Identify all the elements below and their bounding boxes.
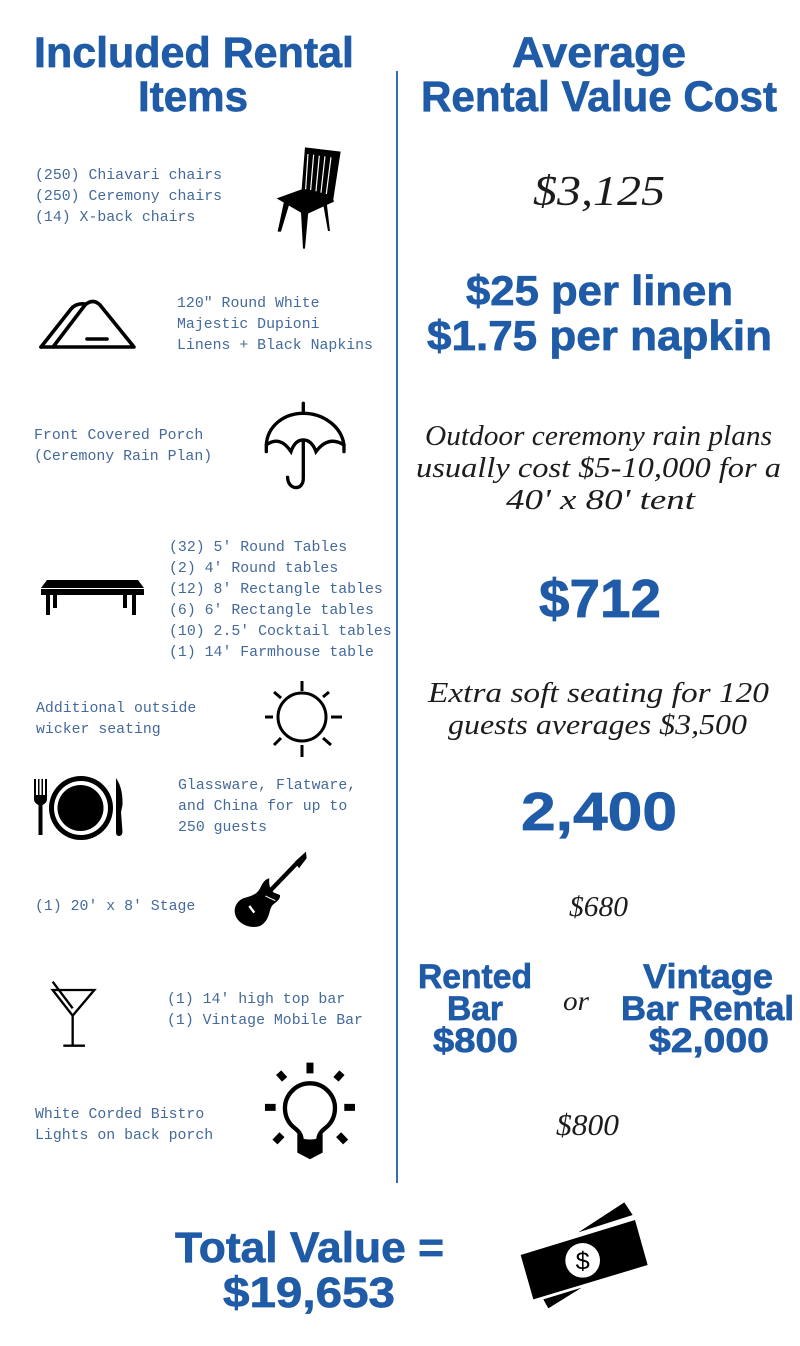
cost: rented bar <box>418 958 532 1060</box>
text: linens: Majestic Dupioni <box>177 317 320 333</box>
text: chairs: (250) Ceremony chairs <box>35 189 222 205</box>
cost: glassware: 2,400 <box>521 782 677 842</box>
heading: average rental value cost: Average <box>512 29 686 77</box>
cost: tables: $712 <box>539 569 661 629</box>
text: porch: (Ceremony Rain Plan) <box>34 449 212 465</box>
cost: soft seating <box>427 677 770 741</box>
cost: stage: $680 <box>569 891 629 923</box>
text: bars: (1) 14' high top bar <box>167 992 345 1008</box>
text: chairs: (250) Chiavari chairs <box>35 168 222 184</box>
cost: linens: $25 per linen <box>466 267 733 314</box>
cost: soft seating: guests averages $3,500 <box>448 709 748 741</box>
cost: vintage bar <box>621 958 794 1060</box>
text: tables: (12) 8' Rectangle tables <box>169 582 383 598</box>
text: stage: (1) 20' x 8' Stage <box>35 899 195 915</box>
text: wicker seating <box>36 701 196 738</box>
icon: sun <box>265 681 342 757</box>
cost: bistro lights: $800 <box>556 1107 620 1142</box>
text: chairs <box>35 168 222 226</box>
text: linens <box>177 296 373 354</box>
cost: rain plan: Outdoor ceremony rain plans <box>425 420 772 452</box>
text: wicker seating: wicker seating <box>36 722 161 738</box>
icon: money <box>521 1202 648 1308</box>
text: tables: (1) 14' Farmhouse table <box>169 645 374 661</box>
heading: average rental value cost: Rental Value Cost <box>421 73 777 121</box>
text: porch <box>34 428 212 465</box>
text: linens: Linens + Black Napkins <box>177 338 373 354</box>
text: glassware: and China for up to <box>178 799 347 815</box>
icon: chair <box>277 147 341 249</box>
text: bistro lights: Lights on back porch <box>35 1128 213 1144</box>
total value <box>175 1224 444 1317</box>
cost: rain plan: usually cost $5-10,000 for a <box>416 452 781 484</box>
text: chairs: (14) X-back chairs <box>35 210 195 226</box>
text: bars: (1) Vintage Mobile Bar <box>167 1013 363 1029</box>
text: tables: (32) 5' Round Tables <box>169 540 347 556</box>
total value: $19,653 <box>223 1269 395 1317</box>
total value: Total Value = <box>175 1224 444 1272</box>
icon: martini glass <box>53 982 94 1046</box>
heading: included rental items <box>34 29 354 121</box>
cost: vintage bar: Bar Rental <box>621 990 794 1028</box>
cost: rented bar: $800 <box>433 1022 518 1060</box>
cost: rented bar: Rented <box>418 958 532 996</box>
icon: plate and cutlery <box>34 776 123 840</box>
center divider line <box>396 71 398 1183</box>
text: tables <box>169 540 392 661</box>
text: tables: (10) 2.5' Cocktail tables <box>169 624 392 640</box>
cost: linens <box>427 267 772 359</box>
cost: vintage bar: $2,000 <box>649 1022 769 1060</box>
text: bars <box>167 992 363 1029</box>
cost: rain plan <box>416 420 781 516</box>
text: glassware: Glassware, Flatware, <box>178 778 356 794</box>
icon: money: $ <box>576 1247 590 1275</box>
text: tables: (2) 4' Round tables <box>169 561 338 577</box>
icon: umbrella <box>266 403 344 488</box>
cost: linens: $1.75 per napkin <box>427 312 772 359</box>
text: bistro lights: White Corded Bistro <box>35 1107 204 1123</box>
text: tables: (6) 6' Rectangle tables <box>169 603 374 619</box>
icon: linens <box>41 302 134 347</box>
text: glassware: 250 guests <box>178 820 267 836</box>
cost: rented bar: Bar <box>447 990 503 1028</box>
cost: soft seating: Extra soft seating for 120 <box>427 677 770 709</box>
heading: included rental items: Items <box>138 73 248 121</box>
heading: included rental items: Included Rental <box>34 29 354 77</box>
icon: table <box>41 580 144 615</box>
heading: average rental value cost <box>421 29 777 121</box>
icon: guitar <box>235 852 307 927</box>
cost: chairs: $3,125 <box>533 169 665 215</box>
cost: rain plan: 40' x 80' tent <box>506 484 696 516</box>
text: wicker seating: Additional outside <box>36 701 196 717</box>
icon: light bulb <box>265 1063 355 1159</box>
text: linens: 120" Round White <box>177 296 320 312</box>
cost: vintage bar: Vintage <box>643 958 773 996</box>
text: bistro lights <box>35 1107 213 1144</box>
text: or: or <box>563 986 590 1016</box>
text: porch: Front Covered Porch <box>34 428 203 444</box>
text: glassware <box>178 778 356 836</box>
